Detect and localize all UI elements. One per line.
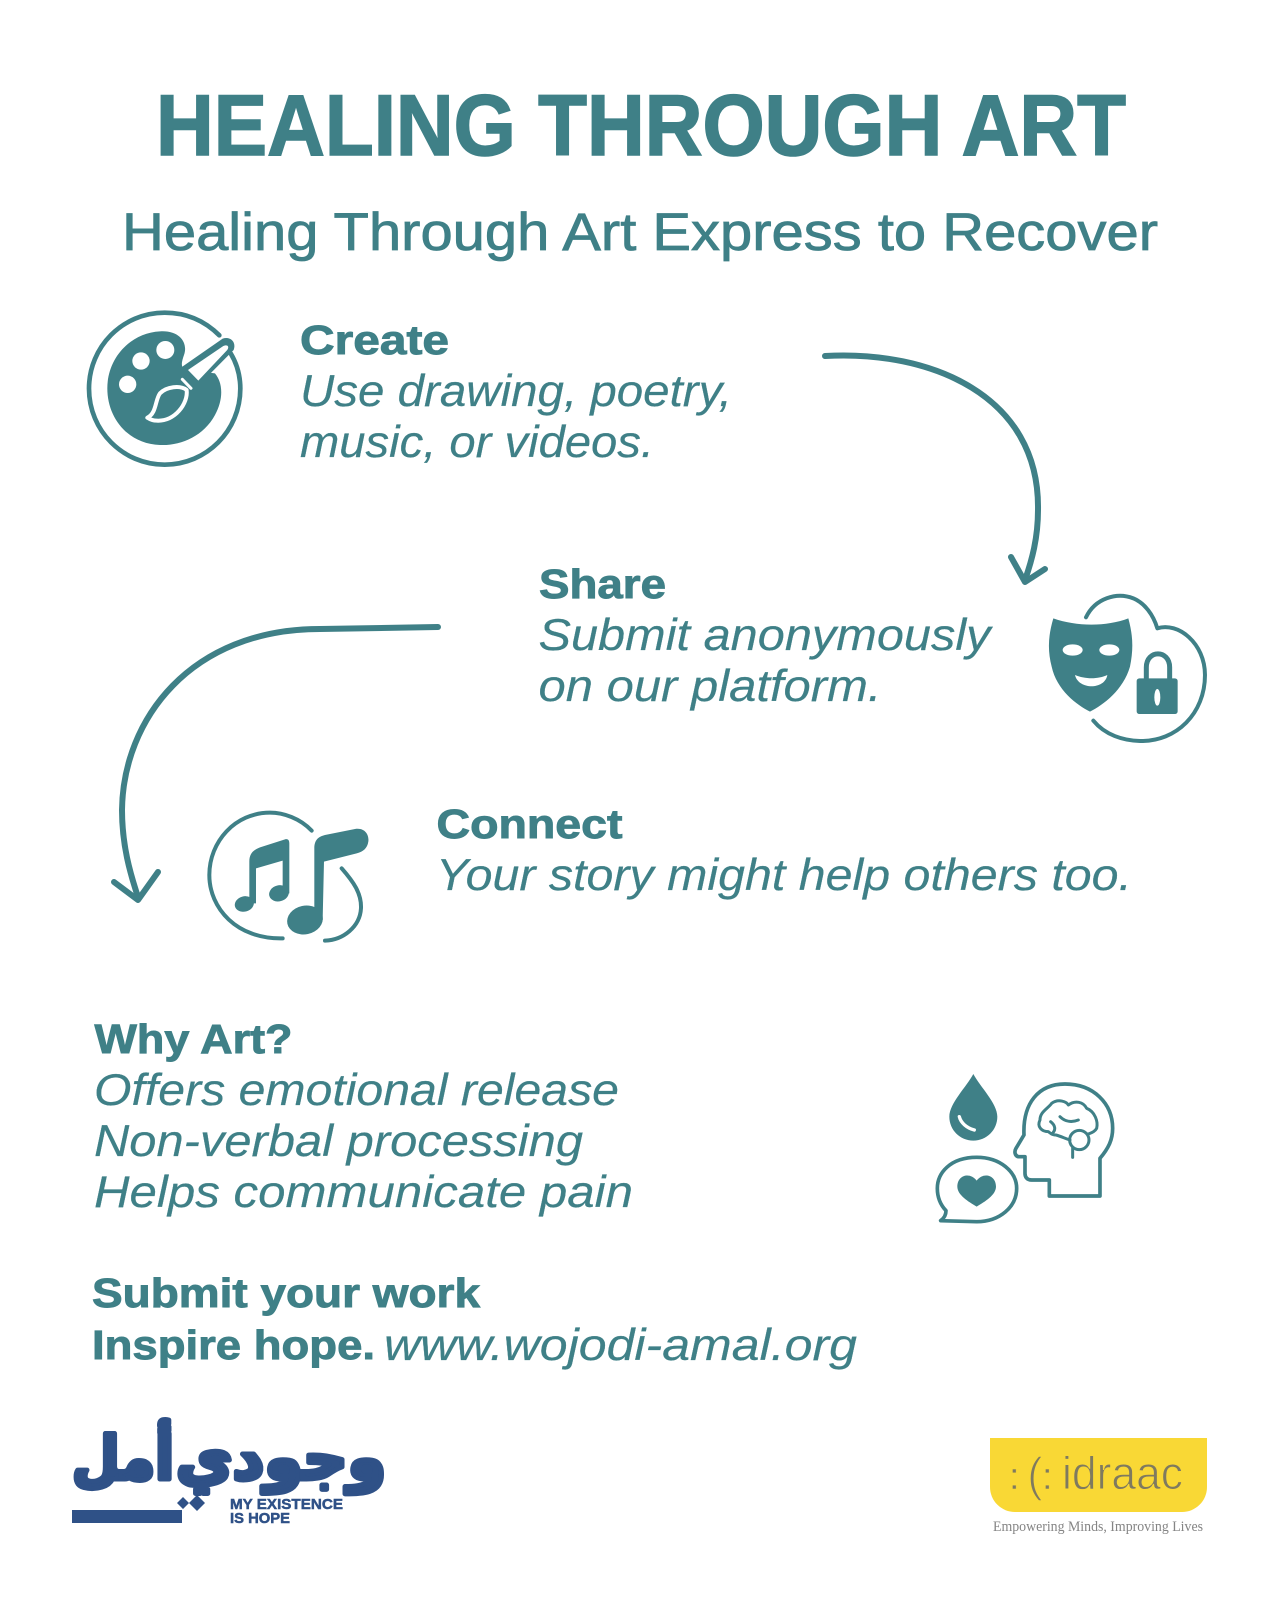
step: create: music, or videos. — [300, 418, 654, 467]
call to action: Submit your work — [92, 1270, 480, 1316]
arrow: share to connect — [114, 627, 438, 900]
step: share: on our platform. — [538, 662, 882, 711]
step: create: Use drawing, poetry, — [300, 367, 732, 416]
call to action — [92, 1270, 857, 1370]
text block: why art: Non-verbal processing — [94, 1117, 583, 1166]
icon: music notes — [209, 813, 368, 941]
step: connect: Your story might help others too. — [436, 851, 1132, 900]
step: share: Submit anonymously — [538, 611, 994, 660]
icon: mask and lock — [1049, 596, 1205, 741]
logo: idraac: ( — [1027, 1449, 1043, 1502]
step: create — [300, 317, 732, 467]
step: connect — [436, 801, 1132, 900]
logo: idraac: idraac — [1062, 1447, 1183, 1499]
subtitle: Healing Through Art Express to Recover — [122, 203, 1158, 262]
text block: why art: Offers emotional release — [94, 1066, 619, 1115]
text block: why art: Why Art? — [94, 1016, 292, 1062]
logo: my existence is hope: وجودي — [176, 1424, 386, 1494]
logo: my existence is hope — [72, 1419, 386, 1527]
title: HEALING THROUGH ART — [156, 78, 1126, 174]
step: connect: Connect — [436, 801, 623, 847]
logo: my existence is hope: IS HOPE — [230, 1510, 290, 1527]
logo: idraac: : — [1009, 1456, 1020, 1498]
text block: why art — [94, 1016, 633, 1217]
logo: idraac: : — [1042, 1456, 1053, 1498]
text block: why art: Helps communicate pain — [94, 1168, 633, 1217]
icon: drop, speech heart and brain head — [937, 1074, 1113, 1222]
logo: idraac: Empowering Minds, Improving Lives — [993, 1519, 1203, 1535]
call to action: Inspire hope. — [92, 1322, 375, 1368]
logo: my existence is hope: MY EXISTENCE — [230, 1496, 343, 1513]
call to action: www.wojodi-amal.org — [384, 1321, 857, 1370]
icon: palette and brush — [89, 313, 240, 465]
arrow: create to share — [825, 355, 1045, 582]
step: share: Share — [539, 561, 666, 607]
step: share — [538, 561, 994, 711]
logo: idraac — [990, 1438, 1207, 1535]
logo: my existence is hope: أمل — [72, 1419, 174, 1494]
step: create: Create — [300, 317, 449, 363]
